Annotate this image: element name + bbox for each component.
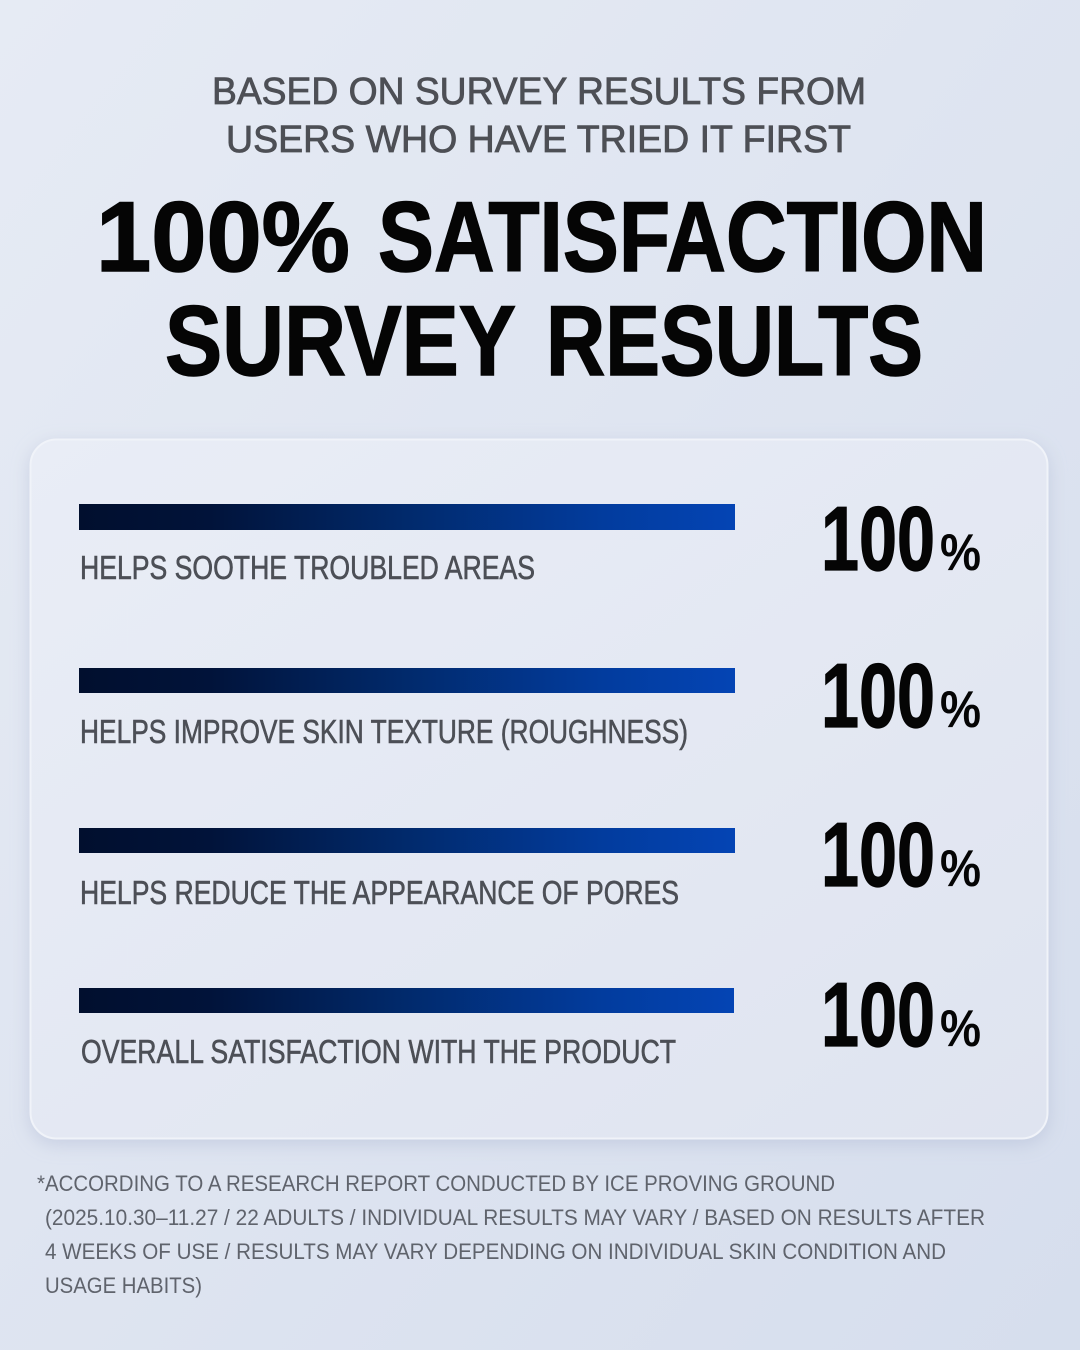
result row: overall satisfaction [79, 965, 981, 1070]
result row: skin texture [79, 646, 981, 750]
result row: soothe troubled areas: % [940, 524, 981, 582]
result row: pores: HELPS REDUCE THE APPEARANCE OF PORES [80, 874, 679, 911]
intro text [212, 71, 866, 161]
result row: soothe troubled areas: 100 [821, 489, 935, 590]
footnote [37, 1171, 985, 1298]
footnote: 4 WEEKS OF USE / RESULTS MAY VARY DEPENDING ON INDIVIDUAL SKIN CONDITION AND [45, 1239, 946, 1264]
result row: overall satisfaction: OVERALL SATISFACTION WITH THE PRODUCT [81, 1033, 676, 1070]
footnote: *ACCORDING TO A RESEARCH REPORT CONDUCTED BY ICE PROVING GROUND [37, 1171, 835, 1196]
title: SURVEY [165, 285, 516, 396]
title [96, 181, 987, 396]
result row: pores: 100 [821, 805, 935, 906]
result row: skin texture: 100 [821, 646, 935, 747]
intro text: BASED ON SURVEY RESULTS FROM [212, 71, 866, 113]
result row: pores: % [940, 840, 981, 898]
result row: overall satisfaction: % [940, 1000, 981, 1058]
footnote: USAGE HABITS) [45, 1273, 202, 1298]
result row: skin texture: % [940, 681, 981, 739]
title: SATISFACTION [378, 181, 987, 292]
panel: survey results [30, 440, 1048, 1138]
result row: soothe troubled areas [79, 489, 981, 590]
title: RESULTS [546, 285, 923, 396]
result row: overall satisfaction: 100 [821, 965, 935, 1066]
result row: skin texture: HELPS IMPROVE SKIN TEXTURE (ROUGHNESS) [80, 713, 688, 750]
intro text: USERS WHO HAVE TRIED IT FIRST [226, 119, 851, 161]
title: 100% [96, 181, 350, 292]
result row: pores [79, 805, 981, 911]
result row: soothe troubled areas: HELPS SOOTHE TROUBLED AREAS [80, 549, 535, 586]
footnote: (2025.10.30–11.27 / 22 ADULTS / INDIVIDUAL RESULTS MAY VARY / BASED ON RESULTS AFTER [45, 1205, 985, 1230]
